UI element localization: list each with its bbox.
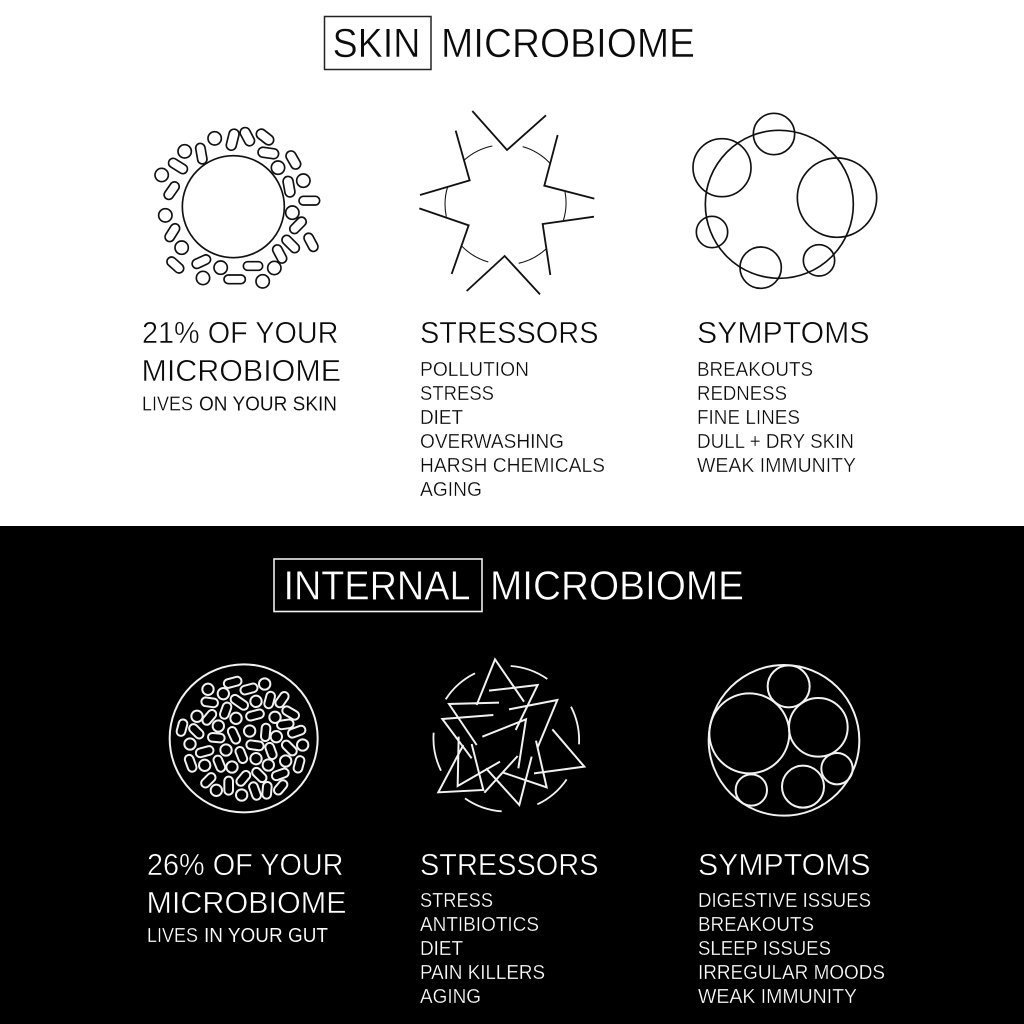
title: skin microbiome: SKIN [332, 20, 420, 66]
title: internal microbiome [274, 559, 744, 612]
panel: internal microbiome [0, 526, 1024, 1024]
title: skin microbiome [324, 16, 695, 70]
list: skin symptoms: FINE LINES [697, 407, 800, 429]
list: skin symptoms: WEAK IMMUNITY [697, 455, 856, 477]
list: internal stressors: DIET [420, 938, 463, 960]
list: skin symptoms: REDNESS [697, 383, 787, 405]
list: internal stressors: STRESS [420, 890, 493, 912]
list: internal stressors: ANTIBIOTICS [420, 914, 539, 936]
text: 21% of your microbiome: LIVES [142, 394, 193, 416]
text: 26% of your microbiome: 26% OF YOUR [147, 848, 344, 882]
title: internal microbiome: MICROBIOME [490, 562, 744, 608]
text: 21% of your microbiome: ON YOUR SKIN [199, 394, 337, 416]
text: internal stressors: STRESSORS [420, 848, 598, 882]
list: skin symptoms [697, 359, 856, 477]
icon: internal stressors triangles [433, 659, 584, 811]
text: skin symptoms: SYMPTOMS [697, 316, 870, 350]
list: internal stressors [420, 890, 545, 1008]
text: skin stressors [420, 316, 605, 501]
icon: skin symptoms circles [693, 113, 877, 288]
text: skin symptoms [697, 316, 870, 477]
text: internal symptoms [698, 848, 885, 1008]
list: skin stressors: AGING [420, 479, 482, 501]
list: internal symptoms: SLEEP ISSUES [698, 938, 831, 960]
list: internal stressors: AGING [420, 986, 481, 1008]
list: skin stressors: DIET [420, 407, 463, 429]
text: 21% of your microbiome [142, 316, 341, 416]
list: internal symptoms [698, 890, 885, 1008]
list: internal symptoms: BREAKOUTS [698, 914, 814, 936]
list: skin symptoms: DULL + DRY SKIN [697, 431, 854, 453]
list: internal symptoms: WEAK IMMUNITY [698, 986, 857, 1008]
list: skin stressors: OVERWASHING [420, 431, 564, 453]
text: 26% of your microbiome [146, 848, 346, 947]
text: skin stressors: STRESSORS [420, 316, 598, 350]
text: 26% of your microbiome: IN YOUR GUT [204, 925, 328, 947]
list: skin stressors: POLLUTION [420, 359, 529, 381]
icon: microbes around skin circle [155, 126, 320, 288]
list: internal symptoms: IRREGULAR MOODS [698, 962, 885, 984]
title: internal microbiome: INTERNAL [284, 562, 470, 608]
list: skin stressors: STRESS [420, 383, 494, 405]
list: internal symptoms: DIGESTIVE ISSUES [698, 890, 871, 912]
text: 21% of your microbiome: MICROBIOME [142, 354, 341, 388]
text: 21% of your microbiome: 21% OF YOUR [142, 316, 338, 350]
icon: microbes inside gut circle [170, 664, 318, 812]
list: skin symptoms: BREAKOUTS [697, 359, 813, 381]
title: skin microbiome: MICROBIOME [441, 20, 695, 66]
text: internal symptoms: SYMPTOMS [698, 848, 870, 882]
icon: skin stressors star [419, 111, 594, 294]
list: skin stressors [420, 359, 605, 501]
text: 26% of your microbiome: MICROBIOME [146, 886, 346, 920]
list: internal stressors: PAIN KILLERS [420, 962, 545, 984]
icon: internal symptoms circles [709, 665, 859, 816]
text: internal stressors [420, 848, 598, 1008]
text: 26% of your microbiome: LIVES [147, 925, 198, 947]
panel: skin microbiome [0, 0, 1024, 526]
list: skin stressors: HARSH CHEMICALS [420, 455, 605, 477]
